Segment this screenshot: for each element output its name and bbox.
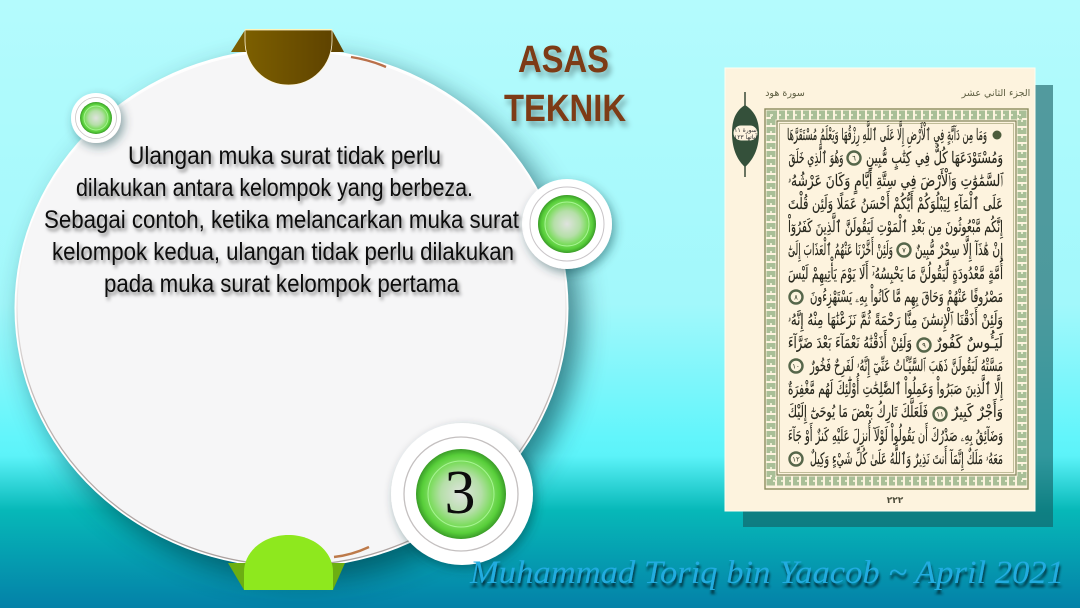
body text: Sebagai contoh, ketika melancarkan muka surat bbox=[44, 206, 519, 234]
Quran verses text: ٱلسَّمَٰوَٰتِ وَٱلْأَرْضَ فِي سِتَّةِ أَيَّامٍ وَكَانَ عَرْشُهُۥ bbox=[788, 167, 1004, 195]
page headers: سورة هود bbox=[765, 88, 805, 99]
Quran page shadow bbox=[743, 85, 1053, 527]
Quran verses text: وَمُسْتَوْدَعَهَا كُلٌّ فِي كِتَٰبٍ مُّبِينٍ bbox=[866, 143, 1003, 172]
Quran verses text bbox=[787, 119, 1004, 471]
title: TEKNIK bbox=[504, 88, 626, 130]
Quran verses text: لَيَـُٔوسٌ كَفُورٌ bbox=[934, 330, 1004, 353]
Quran verses text: وَلَئِنْ أَذَقْنَٰهُ نَعْمَآءَ بَعْدَ ضَرَّآءَ bbox=[788, 329, 912, 353]
body text: kelompok kedua, ulangan tidak perlu dilakukan bbox=[52, 238, 514, 266]
side ornament: آياتها ١٢٣ bbox=[734, 132, 757, 141]
number 3: 3 bbox=[444, 459, 476, 527]
right green button bbox=[522, 179, 612, 269]
body text: dilakukan antara kelompok yang berbeza. bbox=[76, 174, 473, 202]
verse markers: ١٢ bbox=[792, 456, 800, 464]
side ornament: سورة ١١ bbox=[734, 127, 757, 134]
Quran verses text: وَلَئِنْ أَذَقْنَا ٱلْإِنسَٰنَ مِنَّا رَحْمَةً ثُمَّ نَزَعْنَٰهَا مِنْهُ إِنَّهُۥ bbox=[788, 306, 1003, 332]
green bottom tab bbox=[228, 535, 345, 590]
verse markers: ٦ bbox=[852, 154, 856, 162]
title: ASAS bbox=[518, 39, 609, 81]
verse markers: ٩ bbox=[922, 342, 926, 350]
Quran verses text: وَلَئِنْ أَخَّرْنَا عَنْهُمُ ٱلْعَذَابَ إِلَىٰٓ bbox=[788, 236, 893, 262]
verse markers: ١١ bbox=[936, 410, 944, 418]
verse markers: ٧ bbox=[902, 246, 906, 254]
body text: Ulangan muka surat tidak perlu bbox=[128, 142, 441, 170]
Quran verses text: فَلَعَلَّكَ تَارِكُ بَعْضَ مَا يُوحَىٰٓ إِلَيْكَ bbox=[788, 396, 928, 424]
author credit: Muhammad Toriq bin Yaacob ~ April 2021 bbox=[469, 555, 1064, 591]
Quran page bbox=[725, 68, 1035, 511]
verse markers: ٨ bbox=[794, 294, 798, 302]
number 3 button bbox=[391, 423, 533, 565]
side ornament bbox=[732, 92, 759, 177]
verse markers: ١٠ bbox=[792, 362, 800, 370]
small green button bbox=[71, 93, 121, 143]
page headers bbox=[765, 88, 1030, 99]
title bbox=[504, 39, 626, 130]
accent line top bbox=[351, 57, 386, 67]
Quran verses text: وَهُوَ ٱلَّذِي خَلَقَ bbox=[788, 142, 844, 168]
ornamental border bbox=[765, 109, 1028, 489]
page number: ٢٢٢ bbox=[887, 496, 904, 506]
main circle panel bbox=[14, 48, 580, 580]
Quran verses text: إِنْ هَٰذَآ إِلَّا سِحْرٌ مُّبِينٌ bbox=[915, 234, 1004, 262]
page headers: الجزء الثاني عشر bbox=[961, 88, 1030, 99]
verse markers bbox=[790, 130, 1002, 466]
body text bbox=[44, 142, 519, 298]
brown top tab bbox=[231, 30, 344, 85]
Quran verses text: وَأَجْرٌ كَبِيرٌ bbox=[951, 398, 1003, 423]
accent line bottom bbox=[334, 547, 369, 557]
body text: pada muka surat kelompok pertama bbox=[104, 270, 459, 298]
